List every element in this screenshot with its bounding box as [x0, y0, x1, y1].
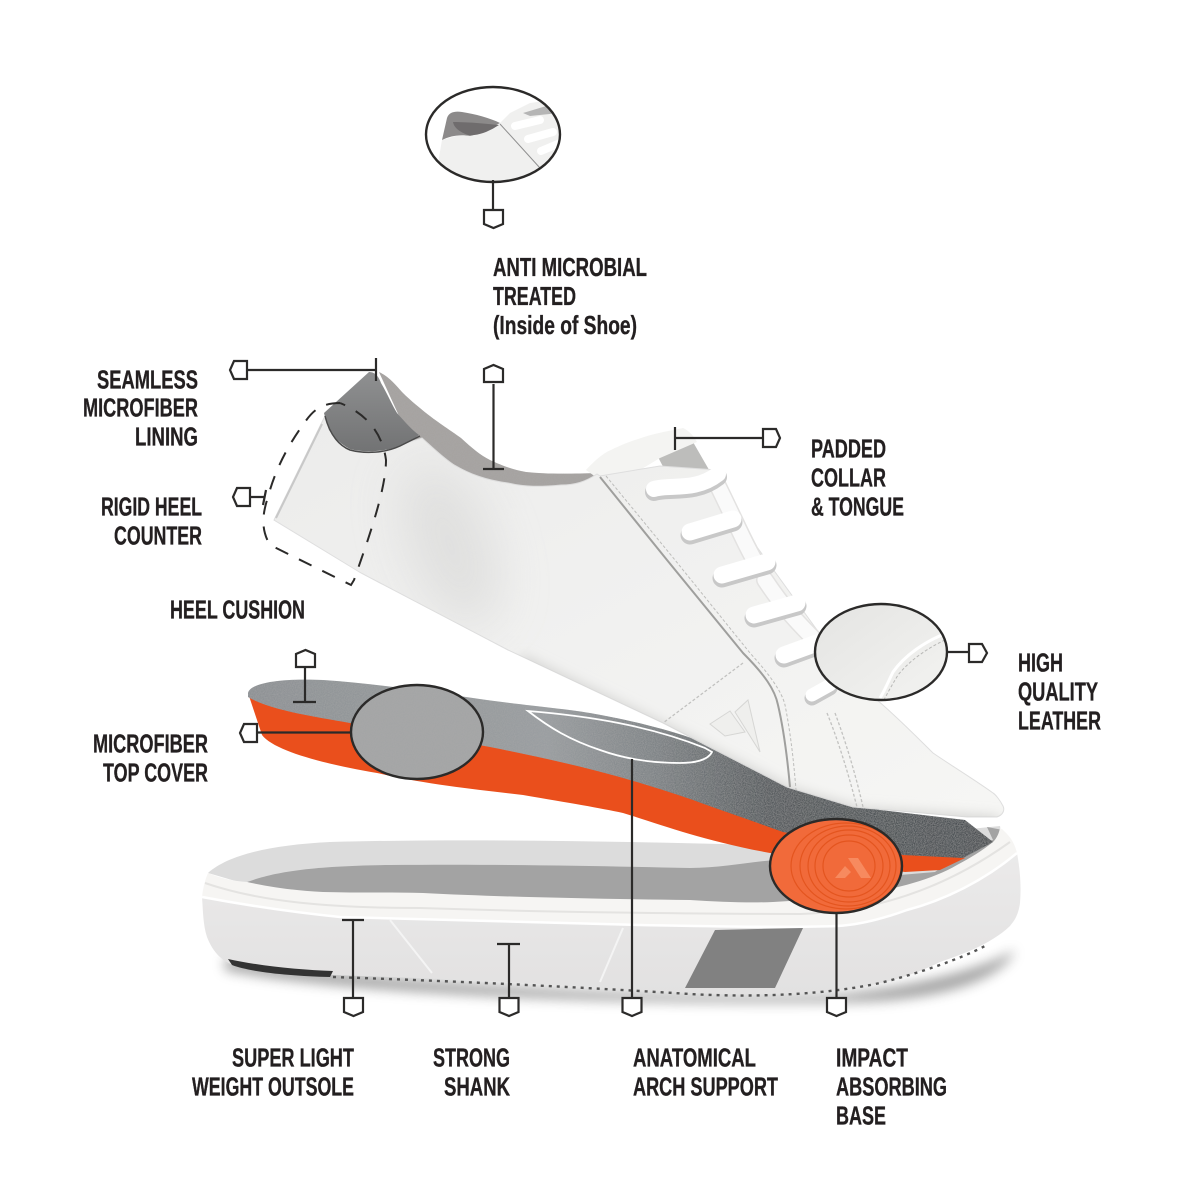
text: anatomical arch support: ANATOMICAL	[633, 1042, 756, 1072]
callout leader: anatomical arch support	[622, 759, 642, 1016]
callout leader: seamless microfiber lining	[230, 358, 376, 381]
text: strong shank	[433, 1042, 510, 1102]
midsole and outsole	[202, 826, 1021, 1003]
callout leader: lining up	[483, 365, 504, 469]
text: impact absorbing base: BASE	[836, 1100, 886, 1130]
heel tab stitched edge	[325, 416, 420, 452]
text: microfiber top cover	[93, 728, 208, 788]
text: strong shank: SHANK	[444, 1072, 510, 1102]
text: padded collar and tongue	[811, 434, 904, 522]
text: impact absorbing base: IMPACT	[836, 1042, 908, 1072]
rim highlight	[202, 853, 1017, 927]
side panel stitch	[663, 663, 863, 807]
microfiber lining	[379, 372, 600, 490]
text: padded collar and tongue: PADDED	[811, 434, 886, 464]
inner floor	[247, 827, 1003, 915]
orange foam layer	[249, 696, 965, 872]
callout leader: rigid heel counter	[233, 488, 266, 506]
text: microfiber top cover: MICROFIBER	[93, 728, 208, 758]
text: super light weight outsole: SUPER LIGHT	[232, 1042, 354, 1072]
arch support outline	[528, 711, 712, 763]
detail circle: microfiber top cover	[351, 685, 483, 779]
text: rigid heel counter	[101, 492, 202, 550]
eyestay stitch	[606, 476, 796, 790]
text: heel cushion: HEEL CUSHION	[170, 594, 305, 624]
text: seamless microfiber lining: SEAMLESS	[97, 364, 198, 394]
heel counter dashed outline	[263, 403, 386, 585]
inner wall	[208, 826, 1005, 905]
callout leader: padded collar	[675, 427, 780, 450]
text: rigid heel counter: COUNTER	[114, 520, 202, 550]
grey heel tab	[324, 372, 419, 451]
text: strong shank: STRONG	[433, 1042, 510, 1072]
text: anti microbial treated	[493, 252, 647, 340]
text: high quality leather	[1018, 648, 1101, 736]
text: seamless microfiber lining	[83, 364, 198, 452]
sidewall	[202, 853, 1021, 994]
grey sidewall stripe	[685, 928, 803, 988]
detail circle: impact absorbing base	[770, 819, 902, 913]
callout leader: high quality leather	[948, 644, 987, 662]
infographic: shoe anatomy	[84, 86, 1101, 1125]
tongue	[658, 442, 712, 480]
text: anti microbial treated: TREATED	[493, 281, 576, 311]
dark heel outsole	[228, 959, 333, 977]
rim groove shadow	[205, 842, 1010, 914]
leather shading	[383, 451, 1000, 822]
padded collar	[586, 428, 697, 480]
text: super light weight outsole: WEIGHT OUTSOLE	[192, 1072, 354, 1102]
text: high quality leather: QUALITY	[1018, 676, 1098, 706]
text: anatomical arch support	[633, 1042, 778, 1102]
detail circle: high quality leather	[815, 604, 947, 700]
callout leader: super light outsole	[342, 920, 364, 1016]
callout leader: microfiber top cover	[240, 724, 351, 742]
tread strip	[333, 946, 985, 996]
callout leader: impact absorbing base	[827, 913, 846, 1016]
text: seamless microfiber lining: MICROFIBER	[83, 392, 198, 422]
insole	[248, 680, 993, 872]
text: anatomical arch support: ARCH SUPPORT	[633, 1072, 778, 1102]
side panel lines	[390, 920, 623, 982]
text: padded collar and tongue: COLLAR	[811, 462, 886, 492]
text: microfiber top cover: TOP COVER	[103, 758, 208, 788]
detail circle: anti microbial shoe interior	[426, 87, 570, 190]
heel highlight	[276, 424, 322, 518]
eyestay seam	[600, 477, 790, 787]
text: anti microbial treated: (Inside of Shoe)	[493, 310, 637, 340]
top lip of rim	[202, 828, 1017, 927]
text: high quality leather: HIGH	[1018, 648, 1063, 678]
callout leader: insole up	[293, 650, 316, 702]
text: impact absorbing base: ABSORBING	[836, 1072, 947, 1102]
text: padded collar and tongue: & TONGUE	[811, 492, 904, 522]
text: anti microbial treated: ANTI MICROBIAL	[493, 252, 647, 282]
text: high quality leather: LEATHER	[1018, 706, 1101, 736]
callout leader: strong shank	[497, 944, 520, 1016]
main leather body	[274, 418, 1004, 817]
callout leader: anti microbial	[484, 180, 503, 228]
grey top cover	[248, 680, 993, 858]
text: super light weight outsole	[192, 1042, 354, 1102]
text: impact absorbing base	[836, 1042, 947, 1130]
laces	[654, 474, 830, 698]
text: seamless microfiber lining: LINING	[135, 422, 198, 452]
sneaker upper	[263, 372, 1004, 822]
ground shadow	[225, 950, 1015, 1003]
text: rigid heel counter: RIGID HEEL	[101, 492, 202, 522]
embossed logo	[710, 700, 760, 752]
